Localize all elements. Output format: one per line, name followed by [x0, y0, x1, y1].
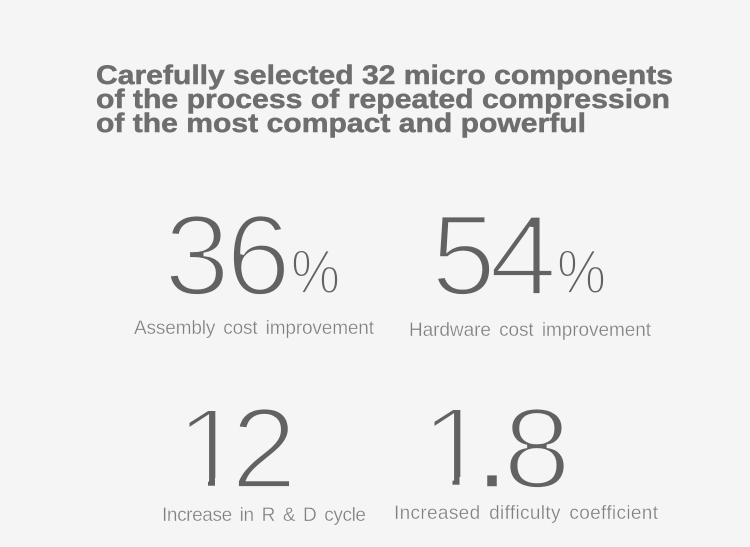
stat: 12 R&amp;D cycle: 2: [231, 385, 297, 513]
stat: 54% hardware cost: 4: [489, 192, 557, 320]
stat: 36% assembly cost: [134, 192, 375, 339]
stat: 12 R&amp;D cycle: Increase in R & D cycle: [162, 505, 366, 526]
stat: 1.8 difficulty coefficient: .: [476, 384, 508, 512]
stat: 1.8 difficulty coefficient: Increased difficulty coefficient: [394, 503, 659, 524]
stat: 1.8 difficulty coefficient: [394, 384, 659, 524]
stat: 12 R&amp;D cycle: [162, 385, 366, 526]
stat: 12 R&amp;D cycle: 1: [175, 385, 245, 513]
stat: 1.8 difficulty coefficient: 1: [420, 384, 490, 512]
title: of the most compact and powerful: [96, 108, 586, 138]
stat: 1.8 difficulty coefficient: 8: [503, 385, 571, 513]
stat: 36% assembly cost: %: [291, 238, 340, 307]
title: Carefully selected 32 micro components: [96, 60, 673, 90]
stat: 54% hardware cost: Hardware cost improvement: [409, 320, 652, 341]
stat: 36% assembly cost: 6: [226, 192, 291, 320]
stat: 54% hardware cost: [409, 192, 652, 341]
title: of the process of repeated compression: [96, 84, 670, 114]
stat: 36% assembly cost: Assembly cost improvement: [134, 318, 375, 339]
stat: 54% hardware cost: 5: [431, 192, 496, 320]
stat: 54% hardware cost: %: [557, 238, 606, 307]
title: [96, 60, 673, 138]
stat: 36% assembly cost: 3: [164, 192, 230, 320]
